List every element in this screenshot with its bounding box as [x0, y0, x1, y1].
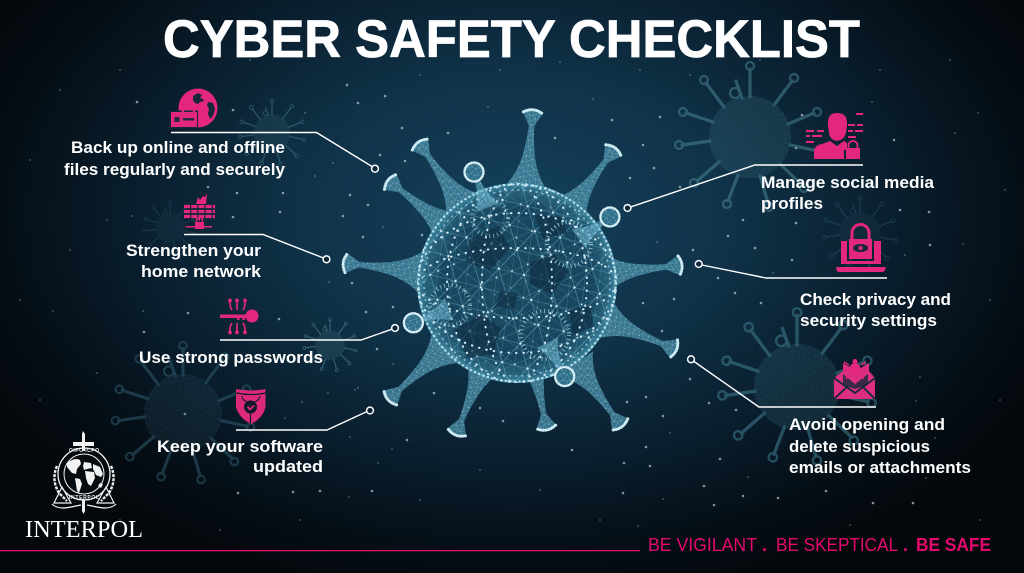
text line 2: files regularly and securely [64, 160, 286, 179]
tagline: be safe: BE SAFE [916, 535, 991, 555]
separator dot: . [762, 535, 767, 555]
laurels [54, 466, 114, 501]
virus: behind home network icon [143, 201, 197, 255]
sword [73, 431, 94, 514]
connector line [220, 329, 392, 340]
callout: suspicious emails [688, 356, 971, 477]
tagline: be skeptical: BE SKEPTICAL [776, 535, 898, 555]
text line 2: profiles [761, 194, 823, 213]
icon: laptop with lock and eye [836, 224, 886, 272]
text line 2: updated [253, 457, 323, 476]
long spikes [341, 108, 685, 443]
central virus [341, 108, 685, 443]
connector dot [392, 325, 398, 331]
virus: upper left [238, 99, 306, 166]
outer ring [58, 448, 110, 500]
connector dot [695, 261, 702, 267]
title: CYBER SAFETY CHECKLIST [163, 10, 860, 69]
callout: software updates [157, 389, 373, 476]
footer line [0, 550, 640, 551]
callout: privacy settings [695, 224, 951, 330]
text: Avoid opening and [789, 415, 945, 434]
tagline: be vigilant: BE VIGILANT [648, 535, 757, 555]
connector dot [688, 356, 694, 363]
connector line [631, 165, 863, 207]
text line 2: home network [141, 262, 262, 281]
icon: person with padlock [806, 113, 863, 159]
icon: envelope with bug [834, 359, 875, 399]
connector line [694, 362, 876, 407]
tagline [648, 535, 991, 555]
text: Keep your software [157, 437, 323, 456]
connector dot [367, 407, 373, 414]
separator dot: . [903, 535, 908, 555]
text: Use strong passwords [139, 348, 323, 367]
small background viruses [112, 62, 898, 483]
virus: upper right [675, 62, 825, 211]
text: Manage social media [761, 173, 935, 192]
sphere body [417, 183, 617, 383]
icon: key with circuits [220, 299, 258, 334]
connector dot [323, 256, 330, 263]
text: Strengthen your [126, 241, 261, 260]
text line 3: emails or attachments [789, 458, 971, 477]
icon: firewall [184, 193, 215, 229]
virus: behind passwords line [303, 318, 357, 372]
globe [64, 454, 104, 494]
ball-tip spikes [400, 158, 625, 391]
text line 2: delete suspicious [789, 437, 930, 456]
wordmark: INTERPOL [25, 517, 143, 543]
connector line [171, 132, 372, 166]
virus: lower left [112, 342, 254, 483]
connector line [702, 265, 887, 278]
callout: home network [126, 193, 330, 281]
scales [52, 487, 116, 508]
emblem [52, 431, 116, 514]
text line 2: security settings [800, 311, 937, 330]
callout: back up files [64, 88, 378, 179]
INTERPOL logo [25, 431, 143, 543]
virus: behind laptop icon [822, 196, 898, 270]
ring lettering lower: INTERPOL [69, 495, 99, 501]
callout: social media [624, 113, 935, 213]
text: Check privacy and [800, 290, 951, 309]
continents [67, 459, 103, 493]
connector line [184, 234, 324, 258]
callout: strong passwords [139, 299, 398, 367]
connector dot [372, 165, 378, 172]
ring lettering: OIPC ICPO [69, 448, 99, 454]
connector dot [624, 205, 631, 211]
icon: globe and padlock [170, 88, 218, 128]
connector line [236, 412, 367, 430]
virus: lower right [718, 308, 876, 465]
text: Back up online and offline [71, 138, 285, 157]
icon: shield with heart check [236, 389, 266, 424]
